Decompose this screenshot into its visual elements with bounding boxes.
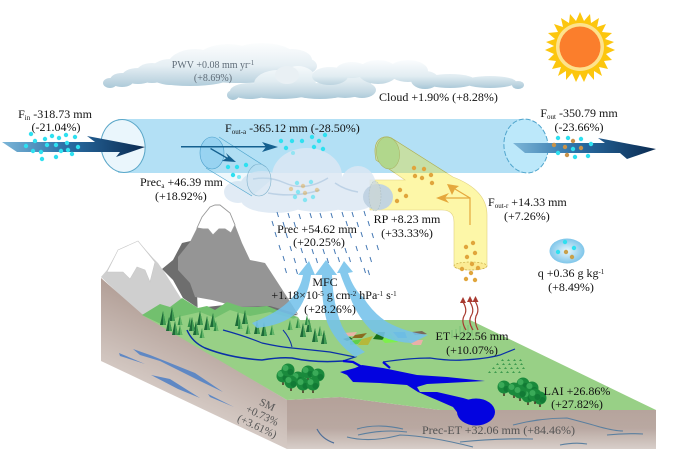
icon: yellow flow arrows: [436, 184, 470, 225]
label: Prec: (+20.25%): [293, 235, 345, 249]
mountain: dark grey: [162, 240, 298, 318]
grass near ET: [452, 325, 472, 340]
label: ET: ET +22.56 mm: [436, 329, 508, 343]
label: ET: (+10.07%): [446, 343, 498, 357]
round trees right: [498, 378, 546, 407]
label: Prec: Prec +54.62 mm: [277, 222, 357, 236]
label: LAI: LAI +26.86%: [544, 384, 610, 398]
label: PWV: PWV +0.08 mm yr: [172, 60, 248, 71]
cloud: precipitation: [224, 148, 393, 213]
mountain snow cap: [197, 205, 235, 235]
label: SM: [235, 391, 289, 441]
underground water: left face: [119, 349, 234, 407]
label: q: -1: [598, 268, 605, 276]
arrow: evapotranspiration: [460, 296, 478, 330]
label: RP: RP +8.23 mm: [374, 212, 440, 226]
label: MFC: (+28.26%): [304, 302, 356, 316]
label: F in: -318.73 mm: [30, 107, 93, 121]
mountain: mid grey: [178, 225, 298, 314]
label: F out-r: out-r: [495, 202, 509, 210]
label: F out: (-23.66%): [555, 120, 603, 134]
recycled moisture dots: [289, 139, 583, 282]
label: F out: -350.79 mm: [556, 106, 618, 120]
label: F out-r: F: [488, 195, 495, 209]
label: F out-a: out-a: [232, 128, 247, 136]
arrow: Prec_a flow: [210, 148, 236, 162]
label: Cloud: Cloud +1.90% (+8.28%): [379, 90, 498, 104]
arrow: F out: [513, 138, 656, 159]
underground water: right face: [317, 418, 643, 447]
rivers: [187, 330, 515, 368]
label: F out-r: +14.33 mm: [508, 195, 567, 209]
conifer forests: [160, 307, 327, 344]
label: F out-a: F: [225, 121, 232, 135]
label: RP: (+33.33%): [381, 226, 433, 240]
block: right soil face: [287, 397, 656, 449]
label: MFC: -5: [318, 290, 324, 298]
cloud: PWV: [103, 43, 317, 88]
block: left soil face: [101, 278, 287, 449]
arrow: F in: [2, 136, 145, 157]
label: Prec a: Prec: [140, 175, 161, 189]
small Prec_a cylinder: [200, 137, 271, 196]
icon: sun: [545, 12, 615, 82]
label: MFC: s: [383, 288, 391, 302]
icon: specific humidity droplet: [550, 238, 584, 264]
yellow recycling pipe: [370, 136, 487, 270]
shrub patch: [488, 359, 525, 373]
label: F out: F: [540, 106, 547, 120]
label: F in: (-21.04%): [32, 120, 80, 134]
rain: [272, 211, 378, 275]
label: PWV: (+8.69%): [194, 73, 232, 84]
label: MFC: -2: [350, 290, 357, 298]
front hills: [160, 310, 305, 332]
label: Prec a: +46.39 mm: [164, 175, 224, 189]
label: q: q +0.36 g kg: [538, 266, 598, 280]
label: F out-a: -365.12 mm (-28.50%): [246, 121, 360, 135]
label: LAI: (+27.82%): [551, 397, 603, 411]
label: F in: in: [25, 114, 31, 122]
label: MFC: g cm: [324, 288, 351, 302]
label: SM: +0.73%: [244, 403, 280, 429]
label: F out-r: (+7.26%): [504, 209, 550, 223]
label: SM: (+3.61%): [235, 413, 279, 441]
mountain: light grey: [101, 241, 205, 316]
label: MFC: -1: [377, 290, 384, 298]
farmland patches: [343, 331, 427, 345]
label: SM: SM: [257, 396, 277, 414]
label: Prec a: a: [161, 182, 165, 190]
atmospheric pipe: [98, 116, 552, 176]
label: Prec a: (+18.92%): [155, 189, 207, 203]
cloud: Cloud cover: [227, 60, 524, 100]
label: MFC: hPa: [356, 288, 378, 302]
arrow: F out-a flow: [181, 142, 278, 152]
lake: [340, 365, 495, 426]
mountain snow cap left: [107, 241, 155, 282]
label: MFC: MFC: [312, 275, 338, 289]
moisture flux arrows: [252, 260, 428, 357]
water vapour dots: [24, 132, 593, 202]
label: PWV: -1: [248, 59, 255, 67]
label: Prec-ET: Prec-ET +32.06 mm (+84.46%): [422, 423, 575, 437]
green hills: [142, 298, 298, 326]
label: MFC: -1: [391, 290, 397, 298]
block: green land surface: [142, 315, 656, 410]
label: F out: out: [547, 113, 556, 121]
label: F in: F: [18, 107, 25, 121]
round trees left: [276, 364, 324, 393]
label: q: (+8.49%): [548, 280, 594, 294]
label: MFC: +1.18×10: [271, 288, 397, 302]
